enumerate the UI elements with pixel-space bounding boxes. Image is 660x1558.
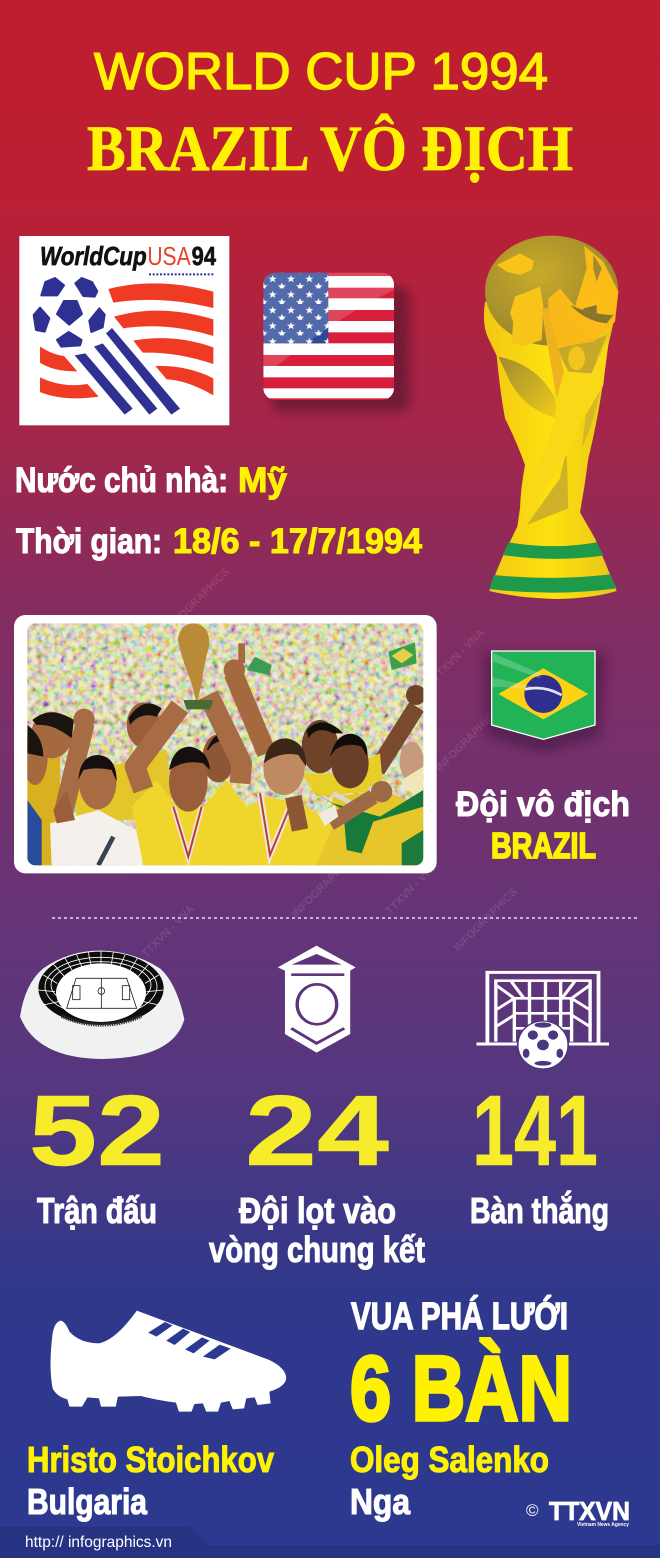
trophy body (484, 302, 617, 599)
stat: teams: vòng chung kết (209, 1229, 425, 1270)
World Cup USA 94 logo (19, 236, 229, 425)
trophy (484, 236, 618, 599)
stat: goals: 141 (472, 1075, 598, 1187)
TTXVN logo: Vietnam News Agency (577, 1522, 629, 1528)
logo wordmark (40, 241, 216, 274)
dates text (16, 522, 423, 561)
USA flag (263, 273, 410, 412)
title line 1: WORLD CUP 1994 (94, 43, 548, 101)
footer url band (0, 1527, 208, 1558)
watermarks (140, 566, 520, 960)
top scorer heading (350, 1294, 572, 1440)
logo blue streaks (75, 328, 180, 415)
logo wordmark: 94 (192, 241, 216, 271)
scorer: Salenko: Nga (350, 1481, 411, 1522)
dates text: Thời gian: (16, 522, 162, 561)
stat: teams: 24 (245, 1075, 389, 1187)
stat: goals (470, 1075, 609, 1231)
champion label (456, 785, 630, 866)
logo ball (34, 278, 105, 347)
top scorer heading: VUA PHÁ LƯỚI (351, 1294, 568, 1338)
stat: matches (29, 1075, 165, 1231)
watermarks: INFOGRAPHICS (164, 566, 232, 634)
trophy globe (485, 236, 618, 346)
watermarks: TTXVN - VNA (384, 860, 441, 917)
watermarks: INFOGRAPHICS (452, 886, 520, 954)
scorer: Salenko: Oleg Salenko (350, 1439, 549, 1480)
watermarks: INFOGRAPHICS (434, 706, 502, 774)
top scorer heading: 6 BÀN (350, 1338, 572, 1440)
title line 2: BRAZIL VÔ ĐỊCH (87, 112, 573, 185)
icon: pennant (278, 946, 356, 1053)
watermarks: TTXVN - VNA (140, 903, 197, 960)
champion label: BRAZIL (491, 825, 596, 866)
stat: matches: Trận đấu (37, 1190, 157, 1231)
host country text: Nước chủ nhà: (15, 461, 228, 500)
players (22, 623, 426, 865)
scorer: Stoichkov (27, 1439, 274, 1522)
logo wordmark: WorldCup (40, 241, 147, 271)
crowd (27, 623, 423, 865)
Brazil flag ribbon (483, 651, 607, 753)
host country text: Mỹ (238, 461, 288, 500)
stat: matches: 52 (29, 1075, 165, 1187)
dates text: 18/6 - 17/7/1994 (173, 522, 423, 561)
footer strip (0, 1545, 660, 1558)
team photo (14, 615, 437, 873)
trophy green bands (503, 542, 603, 559)
TTXVN logo: © (526, 1501, 539, 1520)
scorer: Salenko (350, 1439, 549, 1522)
scorer: Stoichkov: Bulgaria (27, 1481, 148, 1522)
icon: goal and ball (476, 972, 609, 1069)
TTXVN logo: TTXVN (549, 1496, 630, 1526)
icon: stadium (20, 951, 184, 1059)
watermarks: INFOGRAPHICS (290, 852, 358, 920)
footer url band: http:// infographics.vn (25, 1534, 172, 1551)
stat: teams: Đội lọt vào (239, 1190, 396, 1231)
raised trophy (178, 623, 209, 703)
trophy figure (522, 308, 608, 518)
stat: goals: Bàn thắng (470, 1189, 609, 1231)
watermarks: TTXVN - VNA (430, 627, 487, 684)
scorer: Stoichkov: Hristo Stoichkov (27, 1439, 274, 1480)
stat: teams (209, 1075, 425, 1270)
champion label: Đội vô địch (456, 785, 630, 824)
title (87, 43, 573, 185)
logo wordmark: USA (147, 241, 191, 271)
logo red stripes (40, 283, 213, 398)
icon: football boot (51, 1311, 286, 1412)
